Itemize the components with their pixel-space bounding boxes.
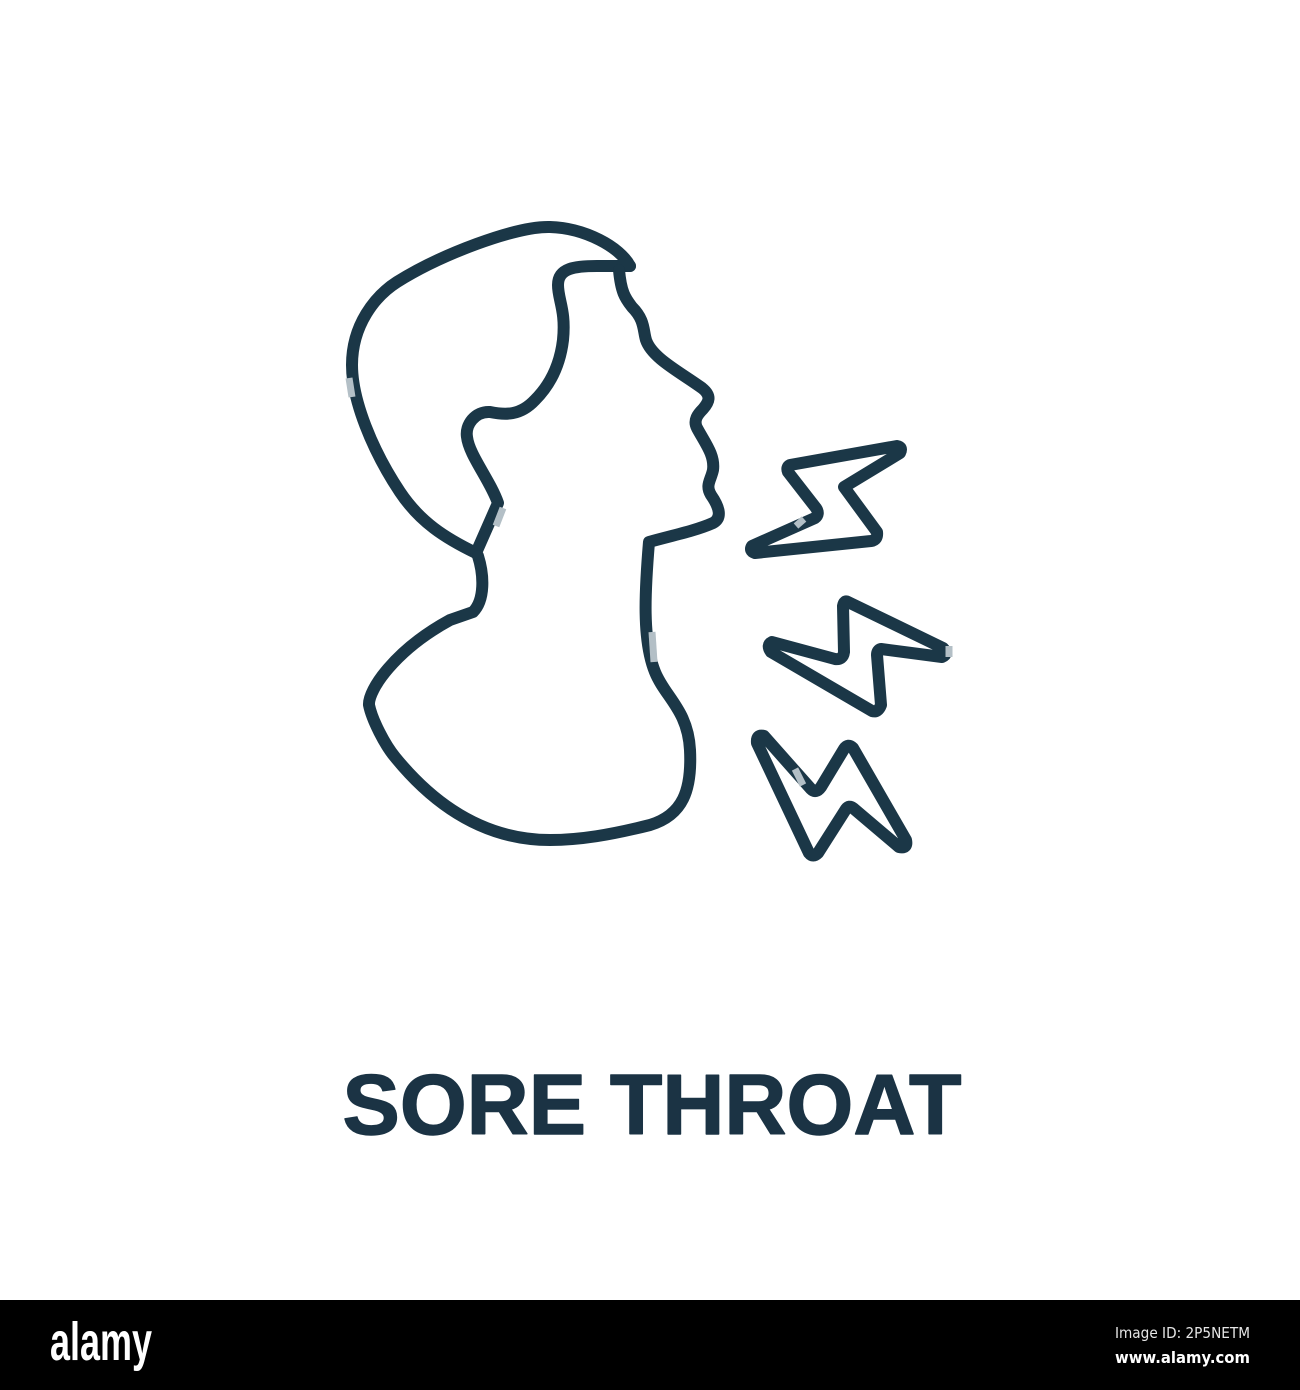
watermark traces on strokes (349, 378, 949, 785)
icon: lightning bolt bottom (757, 736, 906, 856)
icon: head in profile (352, 227, 719, 840)
website: www.alamy.com (1115, 1348, 1250, 1367)
title: SORE THROAT (342, 1058, 962, 1153)
logo: alamy: alamy (50, 1312, 152, 1372)
icon: lightning bolt middle (769, 602, 946, 711)
footer bar (0, 1300, 1300, 1390)
image id: Image ID: 2P5NETM (1115, 1324, 1250, 1342)
icon: lightning bolt top (751, 446, 901, 553)
